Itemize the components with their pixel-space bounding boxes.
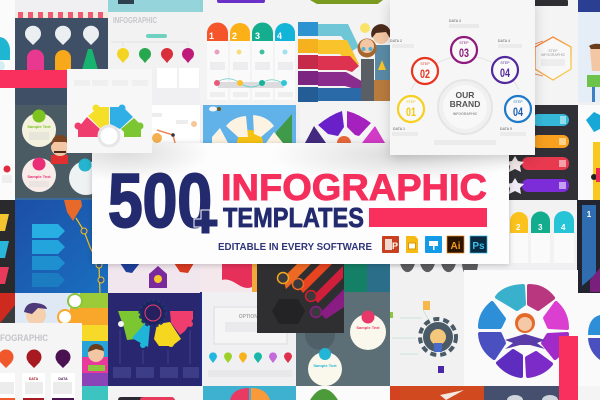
heading: templates: TEMPLATES (223, 202, 364, 233)
panel: character with pill list (0, 293, 108, 341)
step 02: STEP (420, 62, 430, 66)
panel: slate sample text template (15, 88, 103, 200)
brand circle: BRAND (450, 99, 480, 109)
step 02 (412, 58, 438, 84)
panel: rocket timeline (15, 200, 108, 293)
panel: right edge ring (578, 293, 600, 386)
panel: slate gear circles: Sample Text (313, 363, 337, 368)
step 01: STEP (406, 100, 416, 104)
panel: tabs tile right of main card: 3 (538, 223, 543, 232)
data labels: DATA 1 (393, 127, 405, 131)
icon: Illustrator (447, 236, 464, 253)
panel: pink tile with red banner (200, 263, 257, 292)
data labels: DATA 4 (498, 39, 510, 43)
panel: four numbered columns: 2 (232, 31, 237, 41)
panel: pale tile with hex shapes (108, 263, 200, 293)
panel: top chart tile (152, 105, 200, 143)
icon: Google Slides (406, 236, 418, 253)
icon: Photoshop (470, 236, 487, 253)
step 04 purple: STEP (500, 61, 510, 65)
icon: Photoshop: Ps (472, 241, 485, 252)
panel: bee flower template (203, 105, 296, 156)
panel: infographic card bottom-left (0, 323, 82, 400)
red accent bar bottom-right (559, 336, 578, 400)
icon: PowerPoint: P (392, 241, 398, 251)
panel: top-left edge tile (0, 0, 15, 71)
red accent bar top-left (0, 70, 68, 88)
panel: character on pale blue (578, 12, 600, 102)
icon: plus (194, 210, 218, 234)
heading: 500: 500 (108, 159, 212, 244)
brand circle: OUR (456, 90, 474, 100)
panel: tabs tile right of main card: 2 (516, 223, 521, 232)
brand circle: INFOGRAPHIC (453, 112, 478, 116)
step 03 (451, 37, 477, 63)
step 01: 01 (406, 105, 416, 119)
step 02: 02 (420, 67, 430, 81)
panel: main title card (89, 141, 512, 268)
step 04 blue: STEP (513, 100, 523, 104)
petal 5 (498, 351, 521, 376)
panel: options with pins (200, 292, 296, 386)
panel: face on colored bands (82, 341, 108, 386)
panel: top infographic with map pins: INFOGRAPHIC (113, 16, 157, 25)
panel: gear avatar template (390, 263, 478, 386)
petal 6 (480, 334, 504, 358)
data labels: DATA 2 (390, 39, 402, 43)
petal 1 (529, 286, 553, 309)
petal 8 (497, 286, 524, 309)
step 04 blue: 04 (513, 105, 523, 119)
panel: slate gear circles (296, 263, 390, 386)
panel: slate sample text template: Sample Text (27, 174, 51, 179)
panel: infographic card bottom-left: DATA (58, 377, 68, 381)
panel: purple options template (300, 105, 390, 150)
panel: tabs tile right of main card (505, 200, 577, 263)
panel: four numbered columns: 1 (209, 31, 214, 41)
panel: ribbon list with characters (298, 0, 390, 105)
panel: bottom strip left (82, 386, 203, 400)
panel: infographic card bottom-left: FOGRAPHIC (0, 333, 48, 343)
panel: tabs tile right of main card: 4 (561, 223, 566, 232)
panel: options with pins: OPTIONS (239, 314, 262, 320)
panel: dark hexagon diagonal bars (257, 263, 344, 333)
icon: hexagon callout: STEP (548, 49, 558, 53)
avatar (505, 313, 545, 349)
step 01 (398, 96, 424, 122)
data labels: DATA 3 (449, 19, 461, 23)
panel: slate sample text template: Sample Text (27, 124, 51, 129)
panel: dark pins template (15, 12, 108, 105)
step 03: STEP (459, 41, 469, 45)
panel: slate gear circles: Sample Text (356, 325, 380, 330)
panel: four numbered columns (200, 0, 298, 105)
step 03: 03 (459, 46, 469, 60)
brand circle (438, 80, 492, 134)
panel: octagon petals card (464, 270, 578, 386)
panel: gear fan template (67, 69, 152, 153)
icon: two characters (358, 24, 390, 101)
heading: infographic: INFOGRAPHIC (221, 166, 487, 208)
panel: dark blue tile right (577, 200, 600, 293)
panel: bottom strip right (400, 386, 600, 400)
icon: Illustrator: Ai (450, 241, 461, 252)
panel: four numbered columns: 4 (277, 31, 282, 41)
panel: marker tile (578, 105, 600, 200)
panel: black tile with triangles (0, 200, 15, 293)
panel: dark pills list (506, 105, 578, 200)
icon: Keynote (425, 236, 442, 253)
panel: navy gear fan template (108, 293, 200, 386)
step 04 purple (492, 57, 518, 83)
petal 3 (543, 334, 567, 358)
step 04 purple: 04 (500, 66, 510, 80)
panel: bottom strip centre (203, 386, 400, 400)
tagline: EDITABLE IN EVERY SOFTWARE (218, 241, 372, 253)
icon: hexagon callout: INFOGRAPHIC (541, 53, 566, 57)
panel: our brand steps card (390, 0, 535, 155)
icon: PowerPoint (382, 236, 399, 253)
panel: right chain (495, 0, 600, 105)
panel: four numbered columns: 3 (255, 31, 260, 41)
data labels (390, 19, 526, 145)
petal 2 (545, 303, 567, 328)
panel: infographic card bottom-left: DATA (29, 377, 39, 381)
petal 4 (527, 353, 551, 376)
panel: white tile under red bar (0, 88, 15, 200)
petal 7 (480, 303, 504, 327)
icon: moustache character (51, 135, 69, 164)
step 04 blue (505, 96, 531, 122)
panel: top infographic with map pins (108, 0, 200, 88)
panel: dark blue tile right: 1 (587, 210, 592, 219)
red title bar (369, 208, 487, 227)
data labels: DATA 5 (500, 127, 512, 131)
icon: hexagon callout (535, 37, 571, 80)
